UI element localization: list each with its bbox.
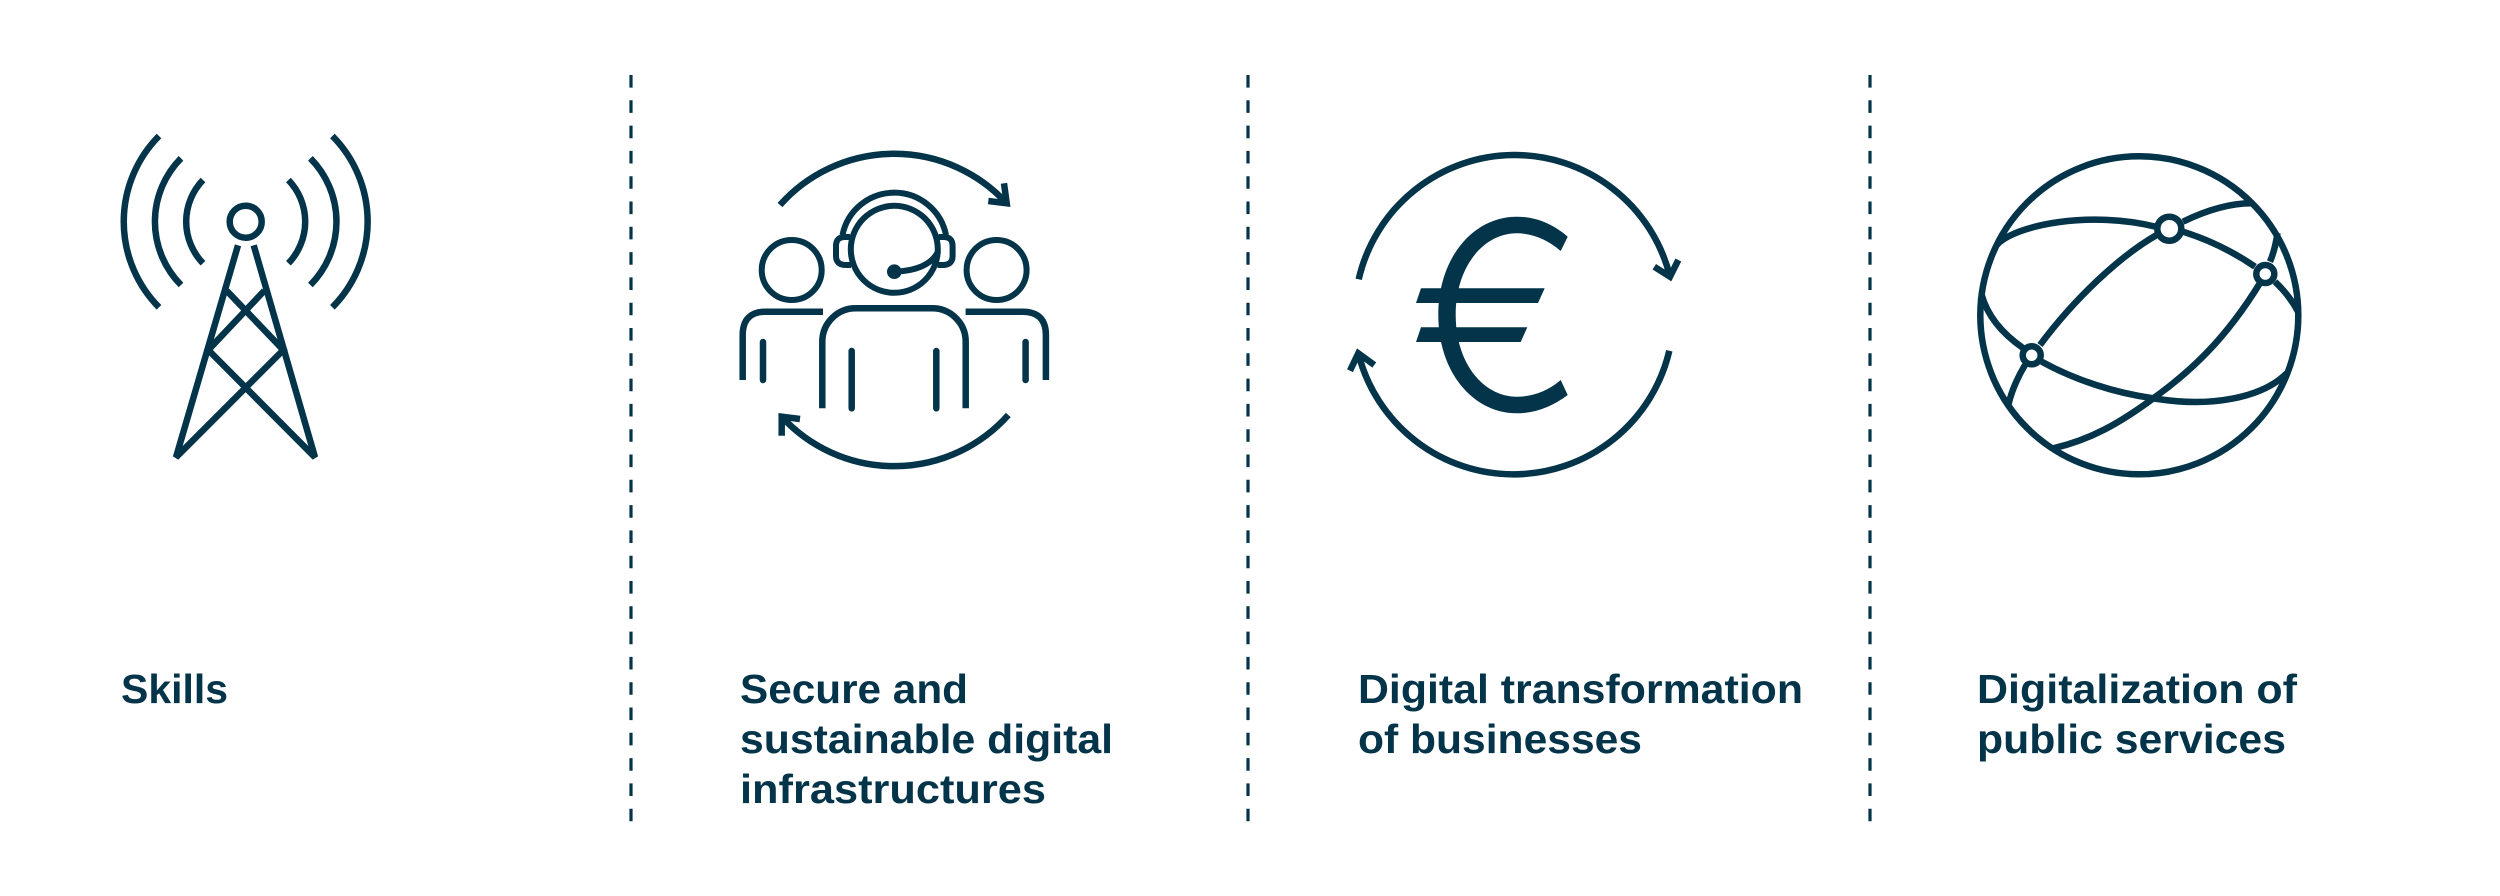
panel: digitalization of public services xyxy=(1977,156,2298,762)
icon: support team with cycle arrows xyxy=(743,154,1046,466)
icon: network globe xyxy=(1980,156,2298,474)
heading: skills: Skills xyxy=(121,666,228,712)
panel: skills xyxy=(121,136,368,712)
panel: digital transformation of businesses xyxy=(1350,155,1803,762)
heading: digitalization of public services: public services xyxy=(1977,716,2286,762)
heading: secure and sustainable digital infrastructures xyxy=(740,666,1113,812)
heading: secure and sustainable digital infrastructures: infrastructures xyxy=(740,766,1046,812)
heading: secure and sustainable digital infrastructures: sustainable digital xyxy=(740,716,1113,762)
panel: secure and sustainable digital infrastructures xyxy=(740,154,1113,812)
heading: secure and sustainable digital infrastructures: Secure and xyxy=(740,666,968,712)
heading: digital transformation of businesses: of businesses xyxy=(1358,716,1642,762)
heading: digitalization of public services: Digitalization of xyxy=(1977,666,2297,712)
heading: digital transformation of businesses xyxy=(1358,666,1803,762)
heading: digitalization of public services xyxy=(1977,666,2297,762)
heading: digital transformation of businesses: Digital transformation xyxy=(1358,666,1803,712)
icon: radio tower xyxy=(124,136,368,457)
icon: euro with cycle arrows xyxy=(1350,155,1678,474)
